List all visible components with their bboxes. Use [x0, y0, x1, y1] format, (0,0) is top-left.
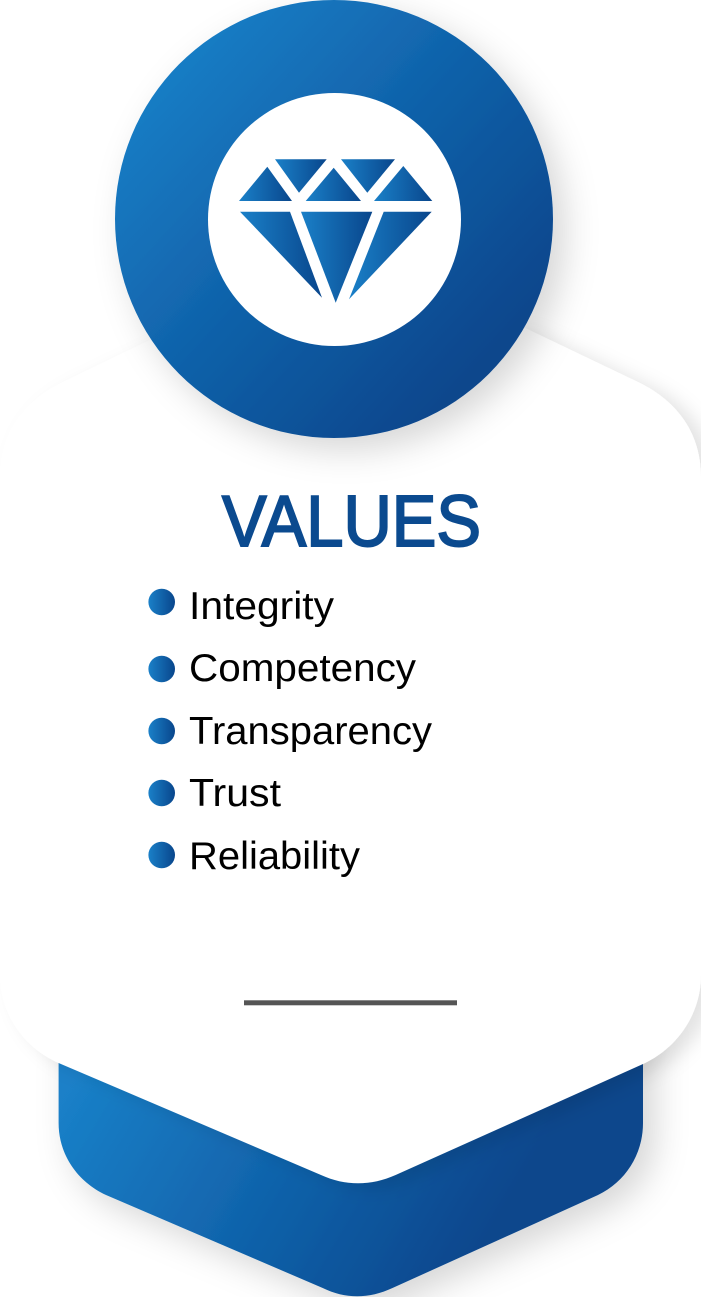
list item: Transparency: Transparency [189, 710, 433, 753]
inner white circle [208, 93, 461, 346]
outer gradient circle [115, 0, 553, 438]
list item: Trust [148, 772, 281, 815]
list item: Competency: Competency [189, 647, 417, 690]
grey divider bar [244, 1000, 457, 1005]
list item: Trust: Trust [189, 772, 281, 815]
heading: VALUES: VALUES [222, 482, 481, 562]
list item: Reliability: Reliability [189, 835, 360, 878]
white hexagonal panel [0, 328, 701, 1183]
top circle with diamond icon [115, 0, 553, 438]
blue chevron base [59, 1000, 643, 1296]
values list [148, 585, 433, 878]
icon: diamond [239, 159, 432, 303]
list item: Integrity: Integrity [189, 585, 335, 628]
